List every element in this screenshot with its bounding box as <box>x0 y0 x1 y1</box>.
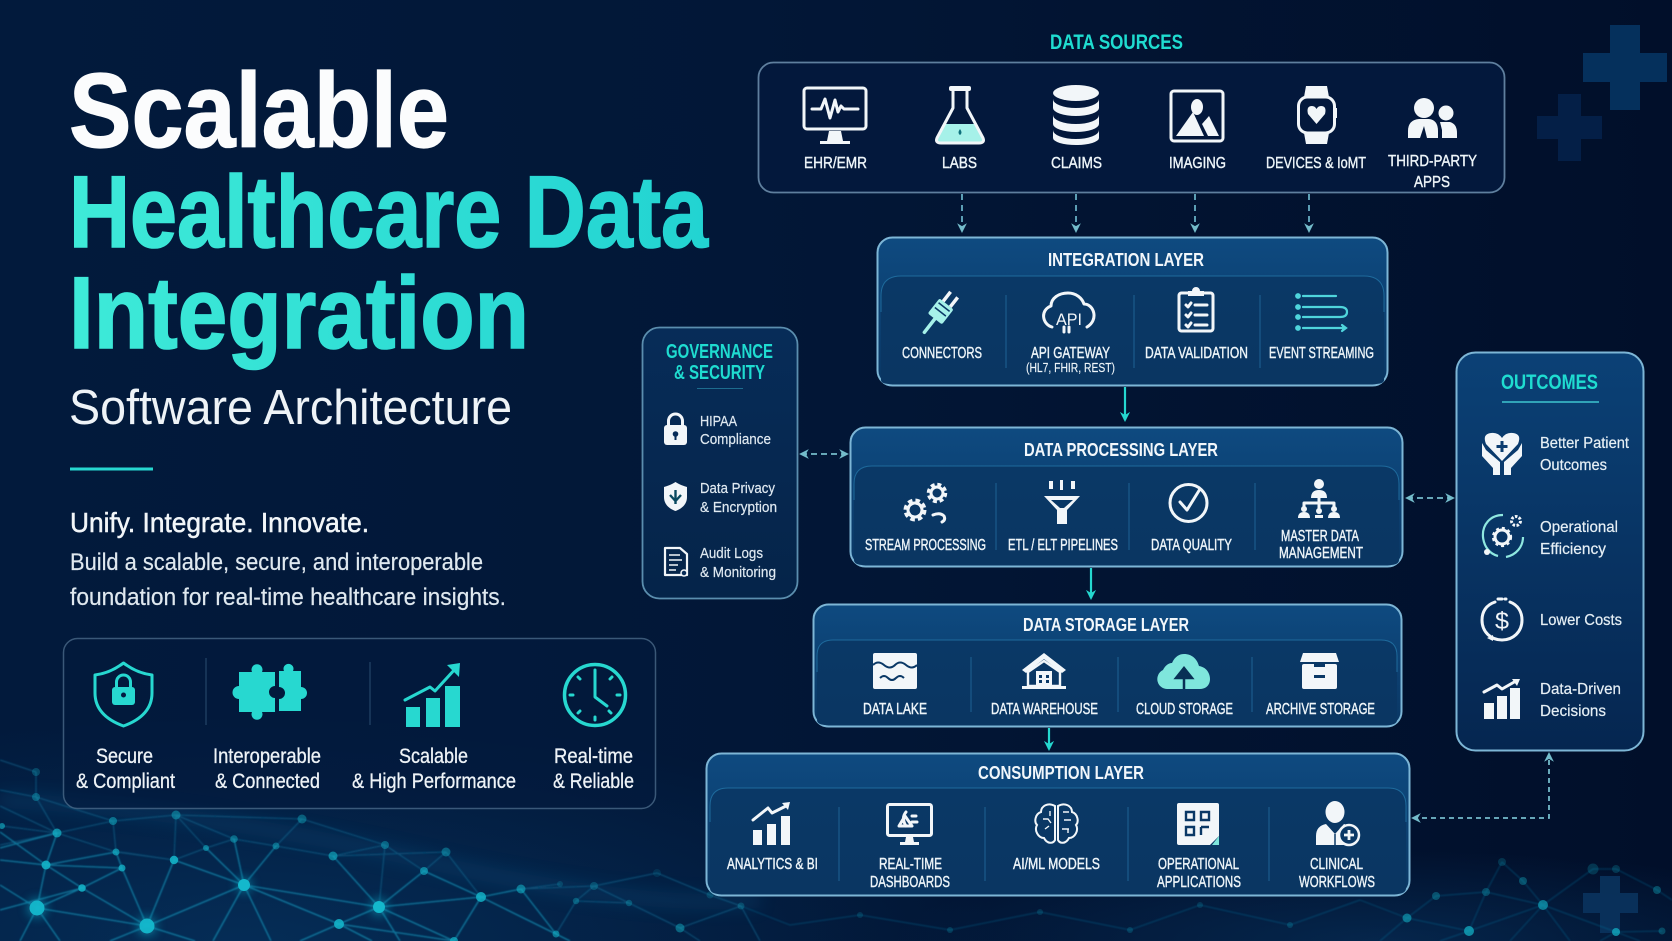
arrow: storage to consumption <box>1048 728 1050 749</box>
icon: applications <box>1177 803 1219 845</box>
icon: lower costs <box>1482 599 1522 641</box>
text: HIPAA <box>700 413 771 448</box>
icon: quality check <box>1170 484 1207 522</box>
text: audit logs: Audit Logs <box>700 545 763 562</box>
title: Integration <box>69 256 529 370</box>
icon: data lake <box>873 653 917 689</box>
text: HIPAA: HIPAA <box>700 413 737 430</box>
icon: padlock <box>664 414 687 445</box>
icon: shield <box>95 663 152 726</box>
panel: data sources <box>758 62 1504 192</box>
processing labels: MANAGEMENT <box>1279 545 1363 562</box>
consumption labels: ANALYTICS & BI <box>727 856 818 873</box>
text: audit logs: & Monitoring <box>700 564 776 581</box>
icon: funnel <box>1044 480 1080 524</box>
panel: consumption layer <box>706 754 1410 896</box>
integration labels: EVENT STREAMING <box>1269 345 1374 362</box>
source labels: LABS <box>942 155 977 172</box>
panel: consumption layer: CONSUMPTION LAYER <box>978 762 1144 783</box>
arrow: governance to processing <box>801 453 847 455</box>
title: Healthcare Data <box>69 155 709 269</box>
icon: org tree <box>1298 479 1340 518</box>
icon: monitor <box>804 88 866 144</box>
consumption labels: AI/ML MODELS <box>1013 856 1100 873</box>
arrow: consumption to outcomes <box>1413 754 1549 818</box>
label: secure: & Compliant <box>76 770 175 793</box>
consumption labels: WORKFLOWS <box>1299 874 1375 891</box>
processing labels: MASTER DATA <box>1281 528 1359 545</box>
panel: data processing layer <box>850 428 1402 566</box>
panel: integration layer: INTEGRATION LAYER <box>1048 249 1204 270</box>
icon: privacy shield <box>664 482 687 511</box>
panel: data storage layer <box>814 604 1402 726</box>
icon: people <box>1408 98 1457 138</box>
panel: integration layer <box>878 238 1388 386</box>
icon: audit document <box>665 548 687 576</box>
label: secure <box>76 745 175 793</box>
text: operational efficiency <box>1540 519 1618 558</box>
integration labels: CONNECTORS <box>902 345 982 362</box>
icon: growth chart <box>405 663 460 727</box>
text: data-driven decisions: Decisions <box>1540 703 1606 720</box>
arrow: processing to outcomes <box>1407 497 1453 499</box>
text: better patient outcomes: Outcomes <box>1540 457 1607 474</box>
processing labels: DATA QUALITY <box>1151 537 1232 554</box>
text: audit logs <box>700 545 776 581</box>
text: operational efficiency: Efficiency <box>1540 541 1606 558</box>
icon: dashboard monitor <box>888 804 932 845</box>
panel: data processing layer: DATA PROCESSING LAYER <box>1024 439 1218 460</box>
icon: analytics <box>753 802 790 845</box>
source labels <box>804 153 1477 191</box>
icon: smartwatch <box>1298 86 1337 144</box>
icon: API cloud: API <box>1056 310 1082 329</box>
decorative medical crosses <box>1537 25 1667 933</box>
heading: data sources: DATA SOURCES <box>1050 31 1183 54</box>
label: scalable: & High Performance <box>352 770 516 793</box>
storage labels: ARCHIVE STORAGE <box>1266 701 1375 718</box>
title: Scalable <box>69 52 449 170</box>
text: better patient outcomes: Better Patient <box>1540 435 1630 452</box>
storage labels: CLOUD STORAGE <box>1136 701 1233 718</box>
label: interoperable: & Connected <box>215 770 320 793</box>
arrows: sources to integration <box>962 194 1309 231</box>
icon: archive box <box>1300 653 1339 689</box>
label: real-time: Real-time <box>554 745 633 768</box>
title <box>69 52 709 370</box>
text: operational efficiency: Operational <box>1540 519 1618 536</box>
consumption labels: DASHBOARDS <box>870 874 950 891</box>
label: real-time: & Reliable <box>553 770 634 793</box>
storage labels: DATA LAKE <box>863 701 927 718</box>
icon: API cloud <box>1044 293 1094 332</box>
consumption labels: CLINICAL <box>1310 856 1363 873</box>
panel: outcomes <box>1456 352 1644 750</box>
tagline: foundation for real-time healthcare insights. <box>70 584 506 611</box>
processing labels <box>865 528 1363 562</box>
label: scalable: Scalable <box>399 745 468 768</box>
subtitle: Software Architecture <box>69 381 512 435</box>
icon: database <box>1053 85 1099 145</box>
icon: cloud storage <box>1157 654 1210 689</box>
text: data privacy <box>700 480 777 516</box>
icon: connector plug <box>917 289 961 338</box>
icon: puzzle <box>232 664 307 720</box>
icon: clock <box>564 664 626 726</box>
icon: clinician <box>1316 801 1359 845</box>
text: better patient outcomes <box>1540 435 1630 474</box>
source labels: APPS <box>1414 174 1450 191</box>
consumption labels <box>727 856 1375 891</box>
text: data privacy: Data Privacy <box>700 480 775 497</box>
tagline <box>70 507 506 611</box>
label: scalable <box>352 745 516 793</box>
icon: data-driven chart <box>1484 679 1520 719</box>
storage labels <box>863 701 1375 718</box>
panel: key benefits <box>64 638 656 808</box>
text: data-driven decisions <box>1540 681 1621 720</box>
text: data privacy: & Encryption <box>700 499 777 516</box>
arrow: processing to storage <box>1090 568 1092 598</box>
label: secure: Secure <box>96 745 153 768</box>
icon: operational efficiency <box>1483 515 1523 557</box>
source labels: CLAIMS <box>1051 155 1102 172</box>
title divider <box>70 468 153 470</box>
panel: governance and security <box>642 328 798 598</box>
consumption labels: REAL-TIME <box>879 856 942 873</box>
icon: caring hands <box>1482 433 1522 475</box>
source labels: DEVICES & IoMT <box>1266 155 1366 172</box>
text: data-driven decisions: Data-Driven <box>1540 681 1621 698</box>
icon: event stream <box>1296 294 1347 331</box>
storage labels: DATA WAREHOUSE <box>991 701 1098 718</box>
panel: governance and security: & SECURITY <box>674 362 765 384</box>
tagline: Build a scalable, secure, and interoperable <box>70 549 483 576</box>
integration labels: (HL7, FHIR, REST) <box>1026 360 1115 375</box>
integration labels <box>902 345 1374 375</box>
label: interoperable <box>213 745 321 793</box>
source labels: EHR/EMR <box>804 155 867 172</box>
icon: imaging <box>1171 91 1223 141</box>
panel: outcomes: OUTCOMES <box>1501 371 1598 394</box>
consumption labels: OPERATIONAL <box>1158 856 1239 873</box>
network background <box>0 760 1672 941</box>
source labels: THIRD-PARTY <box>1388 153 1477 170</box>
text: HIPAA: Compliance <box>700 431 771 448</box>
icon: clipboard <box>1179 287 1213 331</box>
icon: data warehouse <box>1022 653 1066 689</box>
label: real-time <box>553 745 634 793</box>
text: lower costs: Lower Costs <box>1540 612 1622 629</box>
consumption labels: APPLICATIONS <box>1157 874 1241 891</box>
arrow: integration to processing <box>1124 387 1126 420</box>
icon: lower costs: $ <box>1495 608 1509 635</box>
icon: gears <box>906 486 945 522</box>
integration labels: API GATEWAY <box>1031 345 1110 362</box>
icon: AI brain <box>1035 804 1078 843</box>
integration labels: DATA VALIDATION <box>1145 345 1248 362</box>
icon: flask <box>936 86 984 143</box>
panel: data storage layer: DATA STORAGE LAYER <box>1023 614 1189 635</box>
panel: governance and security: GOVERNANCE <box>666 341 773 363</box>
tagline: Unify. Integrate. Innovate. <box>70 507 369 538</box>
label: interoperable: Interoperable <box>213 745 321 768</box>
processing labels: ETL / ELT PIPELINES <box>1008 537 1118 554</box>
source labels: IMAGING <box>1169 155 1226 172</box>
processing labels: STREAM PROCESSING <box>865 537 986 554</box>
